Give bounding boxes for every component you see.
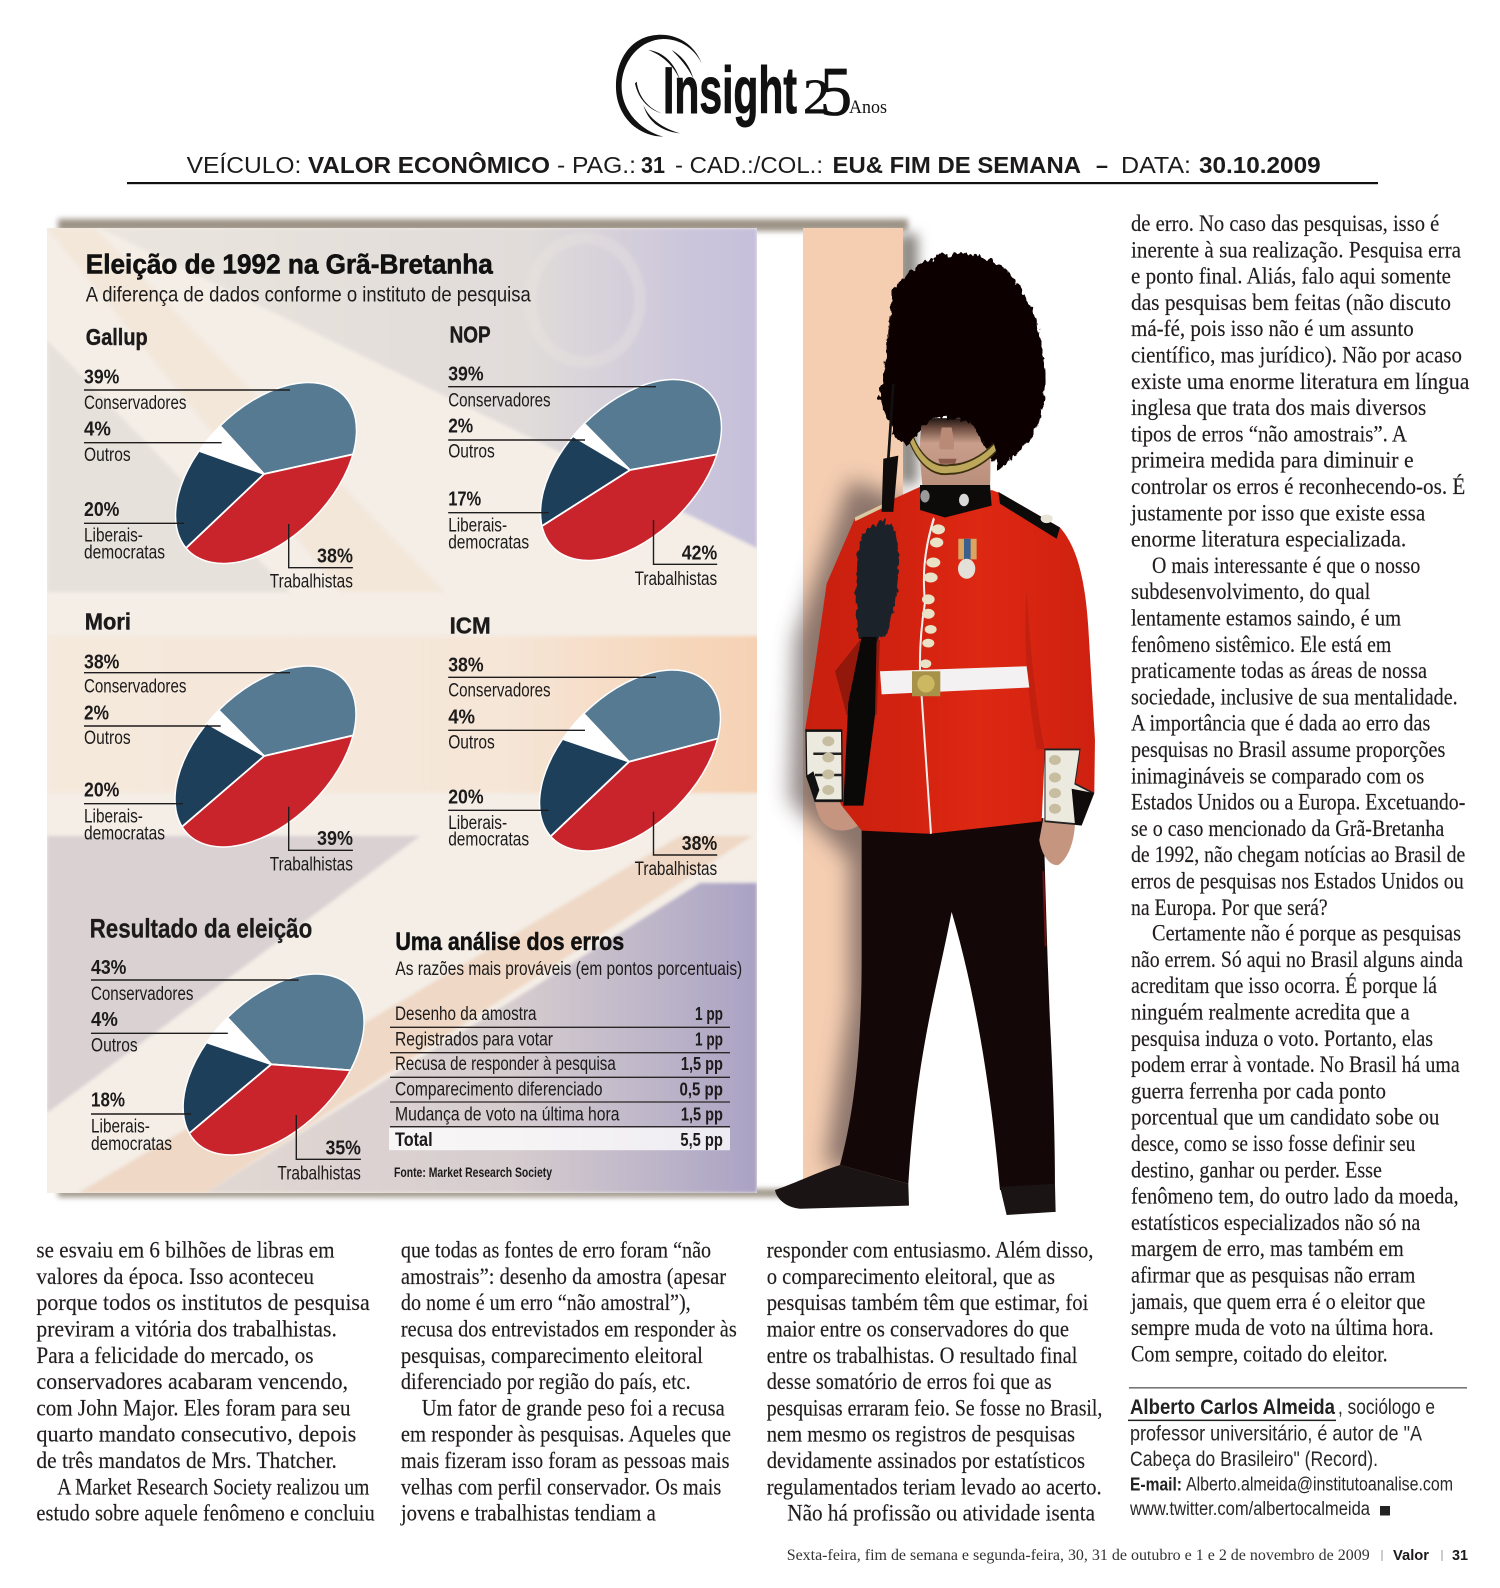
article text: right column: controlar os erros é reconhecendo-os. É xyxy=(1131,474,1465,499)
article text: right column: destino, ganhar ou perder. Esse xyxy=(1131,1157,1382,1182)
article text: column 2: mais fizeram isso foram as pessoas mais xyxy=(401,1448,730,1473)
logo wordmark: Insight xyxy=(663,53,797,127)
header: publication details: - PAG.: xyxy=(557,152,636,178)
article text: column 2: recusa dos entrevistados em responder às xyxy=(401,1316,737,1342)
pie chart: Gallup: 4% xyxy=(84,419,111,441)
pie chart: NOP: democratas xyxy=(448,532,529,553)
left cuff xyxy=(806,731,842,801)
article text: column 3: pesquisas também têm que estimar, foi xyxy=(767,1290,1088,1315)
table: Uma análise dos erros: Comparecimento diferenciado xyxy=(395,1080,602,1101)
pie chart: Gallup: Conservadores xyxy=(84,393,186,414)
panel shadow xyxy=(58,219,918,1197)
article text: right column: fenômeno sistêmico. Ele está em xyxy=(1131,632,1391,657)
epaulette xyxy=(998,492,1060,539)
author note: Alberto.almeida@institutoanalise.com xyxy=(1186,1475,1453,1496)
pie chart: Gallup xyxy=(84,328,358,588)
left boot xyxy=(775,1165,909,1209)
article text: column 2: pesquisas, comparecimento eleitoral xyxy=(401,1343,703,1368)
article text: right column: pesquisa induza o voto. Portanto, elas xyxy=(1131,1026,1433,1051)
page footer: Valor xyxy=(1393,1548,1429,1564)
article text: right column: na Europa. Por que será? xyxy=(1131,895,1328,920)
article text: right column: sociedade, inclusive de sua mentalidade. xyxy=(1131,684,1458,709)
collar xyxy=(920,485,992,518)
guard cast shadow xyxy=(790,480,910,1175)
header: publication details: VEÍCULO: xyxy=(187,152,301,178)
panel: Union Jack background xyxy=(47,228,803,1193)
article text: right column: Certamente não é porque as pesquisas xyxy=(1152,921,1461,946)
pie chart: ICM xyxy=(448,617,722,875)
hands xyxy=(815,802,860,830)
pie chart: Gallup: 38% xyxy=(317,545,353,567)
bearskin hat xyxy=(878,254,1045,471)
pie chart: ICM: ICM xyxy=(450,612,491,638)
table: Uma análise dos erros: Registrados para votar xyxy=(395,1029,554,1050)
article text: right column: porcentual que um candidato sobe ou xyxy=(1131,1105,1440,1130)
article text: right column: podem errar à vontade. No Brasil há uma xyxy=(1131,1052,1460,1077)
article text: column 1: previram a vitória dos trabalhistas. xyxy=(36,1316,337,1342)
article text: column 3: devidamente assinados por estatísticos xyxy=(767,1448,1085,1473)
pie chart: NOP: Outros xyxy=(448,442,495,463)
logo number 25 xyxy=(803,54,852,131)
table: Uma análise dos erros: Total xyxy=(395,1130,433,1151)
pie chart: ICM: 20% xyxy=(448,786,484,808)
right boot xyxy=(1000,1184,1056,1215)
pie chart: Resultado da eleição: democratas xyxy=(91,1134,172,1155)
article text: column 3: desse somatório de erros foi que as xyxy=(767,1369,1052,1394)
article text: right column: subdesenvolvimento, do qual xyxy=(1131,579,1370,604)
trousers xyxy=(840,818,1055,1190)
article text: column 3: entre os trabalhistas. O resultado final xyxy=(767,1343,1077,1368)
pie chart: Resultado da eleição xyxy=(91,918,365,1180)
pie chart: Resultado da eleição: Liberais- xyxy=(91,1116,150,1137)
logo Anos: Anos xyxy=(849,97,887,118)
pie chart: Gallup: Outros xyxy=(84,445,131,466)
table: Uma análise dos erros: Mudança de voto na última hora xyxy=(395,1105,620,1126)
pie chart: Mori: democratas xyxy=(84,823,165,844)
pie chart: Mori xyxy=(84,612,357,870)
article text: column 1: A Market Research Society realizou um xyxy=(57,1474,369,1499)
article text: column 3: nem mesmo os registros de pesquisas xyxy=(767,1422,1075,1447)
pie chart: Resultado da eleição: 43% xyxy=(91,957,127,979)
table: Uma análise dos erros: Uma análise dos erros xyxy=(395,928,624,956)
pie chart: NOP: NOP xyxy=(450,321,491,347)
pie chart: Gallup: Gallup xyxy=(86,324,148,350)
article text: right column: de erro. No caso das pesquisas, isso é xyxy=(1131,211,1439,236)
article text: column 3: maior entre os conservadores do que xyxy=(767,1316,1069,1342)
pie chart: Resultado da eleição: 35% xyxy=(326,1137,361,1159)
pie chart: NOP: Conservadores xyxy=(448,390,551,412)
article text: column 1: porque todos os institutos de pesquisa xyxy=(36,1290,370,1315)
header: publication details: 30.10.2009 xyxy=(1199,152,1321,178)
article text: right column: das pesquisas bem feitas (não discuto xyxy=(1131,290,1451,315)
article text: right column: O mais interessante é que o nosso xyxy=(1152,553,1420,578)
article text: column 1: Para a felicidade do mercado, os xyxy=(36,1343,314,1368)
article text: right column: ninguém realmente acredita que a xyxy=(1131,1000,1410,1024)
pie chart: ICM: Liberais- xyxy=(448,813,507,834)
pie chart: Gallup: democratas xyxy=(84,542,165,563)
article text: right column xyxy=(1130,211,1469,1366)
article text: right column: enorme literatura especializada. xyxy=(1131,527,1406,552)
author note: E-mail: xyxy=(1130,1474,1182,1495)
pie xyxy=(174,665,357,848)
pie chart: NOP: 39% xyxy=(448,364,484,386)
header: publication details: – xyxy=(1096,152,1108,178)
article text: column 3: o comparecimento eleitoral, que as xyxy=(767,1264,1055,1289)
article text: column 2: em responder às pesquisas. Aqueles que xyxy=(401,1422,731,1447)
table: Uma análise dos erros: 1 pp xyxy=(695,1029,723,1049)
tunic placket xyxy=(920,518,934,834)
page footer: 31 xyxy=(1452,1548,1468,1564)
article text: right column: acreditam que isso ocorra. É porque lá xyxy=(1131,973,1437,998)
gold chin strap xyxy=(912,440,995,470)
pie chart: ICM: Outros xyxy=(448,732,495,753)
author note xyxy=(1128,1387,1467,1520)
white belt xyxy=(880,666,1029,694)
author note: Alberto Carlos Almeida xyxy=(1130,1395,1336,1419)
header: publication details: VALOR ECONÔMICO xyxy=(308,151,550,178)
pie chart: Resultado da eleição: 4% xyxy=(91,1009,118,1031)
pie xyxy=(182,973,365,1156)
table: Uma análise dos erros: 5,5 pp xyxy=(680,1130,723,1150)
article text: column 2: que todas as fontes de erro foram “não xyxy=(401,1238,711,1263)
article text: column 1: conservadores acabaram vencendo, xyxy=(36,1369,348,1394)
illustration: royal guard soldier xyxy=(775,254,1095,1215)
article text: column 1: quarto mandato consecutivo, depois xyxy=(36,1422,356,1447)
article text: column 2: velhas com perfil conservador. Os mais xyxy=(401,1474,721,1499)
article text: column 3: Não há profissão ou atividade isenta xyxy=(787,1501,1095,1526)
table: Uma análise dos erros xyxy=(389,928,742,1151)
article text: right column: Com sempre, coitado do eleitor. xyxy=(1131,1341,1388,1366)
vertical peach band xyxy=(803,228,903,1193)
pie chart: Mori: Mori xyxy=(85,608,131,634)
article text: column 1: valores da época. Isso aconteceu xyxy=(36,1264,314,1289)
article text: column 2: do nome é um erro “não amostral”), xyxy=(401,1290,691,1315)
article text: right column: A importância que é dada ao erro das xyxy=(1131,711,1430,736)
pie chart: Mori: 20% xyxy=(84,780,120,802)
pie chart: Resultado da eleição: 18% xyxy=(91,1090,125,1112)
author note: www.twitter.com/albertocalmeida xyxy=(1129,1499,1370,1520)
author note: professor universitário, é autor de "A xyxy=(1130,1423,1422,1446)
pie chart: NOP: 17% xyxy=(448,489,481,511)
pie chart: ICM: Conservadores xyxy=(448,681,551,702)
logo number 25: 5 xyxy=(820,54,852,131)
pie chart: ICM: 38% xyxy=(448,655,484,677)
pie chart: Resultado da eleição: Outros xyxy=(91,1036,138,1057)
article text: column 2: amostrais”: desenho da amostra (apesar xyxy=(401,1264,726,1289)
pie chart: ICM: 38% xyxy=(682,833,717,855)
right cuff xyxy=(1045,749,1093,824)
neck and face xyxy=(919,418,991,496)
header: publication details: - CAD.:/COL.: xyxy=(675,152,823,178)
pie chart: Gallup: Liberais- xyxy=(84,526,143,547)
article text: right column: desce, como se isso fosse definir seu xyxy=(1131,1131,1416,1156)
pie chart: NOP: 42% xyxy=(682,542,717,564)
pie chart: Mori: 2% xyxy=(84,702,109,724)
graphic title: Eleição de 1992 na Grã-Bretanha xyxy=(86,248,493,279)
article text: column 3: pesquisas erraram feio. Se fosse no Brasil, xyxy=(767,1395,1102,1420)
article text: right column: tipos de erros “não amostrais”. A xyxy=(1131,421,1407,446)
article text: right column: sempre muda de voto na última hora. xyxy=(1131,1315,1434,1340)
rifle plume xyxy=(856,522,899,640)
source note: Fonte: Market Research Society xyxy=(394,1165,552,1180)
article text: right column: e ponto final. Aliás, falo aqui somente xyxy=(1131,264,1451,289)
article text: column 3: responder com entusiasmo. Além disso, xyxy=(767,1238,1093,1263)
article text: column 2: jovens e trabalhistas tendiam a xyxy=(400,1501,656,1526)
article text: right column: científico, mas jurídico). Não por acaso xyxy=(1131,342,1462,368)
article text: right column: pesquisas no Brasil assume proporções xyxy=(1131,737,1445,762)
logo number 25: 2 xyxy=(803,68,830,124)
pie chart: ICM: 4% xyxy=(448,706,475,728)
table: Uma análise dos erros: 1,5 pp xyxy=(681,1105,723,1125)
article text: right column: inglesa que trata dos mais diversos xyxy=(1131,395,1426,420)
graphic subtitle: A diferença de dados conforme o instituto de pesquisa xyxy=(86,283,531,307)
article text: right column: inerente à sua realização. Pesquisa erra xyxy=(1131,237,1461,262)
article text: column 1: com John Major. Eles foram para seu xyxy=(36,1395,351,1420)
table: Uma análise dos erros: 1,5 pp xyxy=(681,1054,723,1074)
header: publication details: 31 xyxy=(641,152,665,178)
pie chart: Gallup: Trabalhistas xyxy=(270,572,353,593)
pie chart: ICM: Trabalhistas xyxy=(635,859,717,880)
article text: right column: jamais, que quem erra é o eleitor que xyxy=(1130,1289,1425,1314)
pie chart: Mori: Outros xyxy=(84,728,131,749)
page footer: Sexta-feira, fim de semana e segunda-feira, 30, 31 de outubro e 1 e 2 de novembro de 2009 xyxy=(787,1547,1370,1564)
article text: right column: existe uma enorme literatura em língua xyxy=(1131,369,1469,394)
article text: column 2: Um fator de grande peso foi a recusa xyxy=(422,1395,725,1420)
pie xyxy=(540,378,722,562)
pie chart: NOP xyxy=(448,326,722,585)
pie chart: Mori: Trabalhistas xyxy=(270,855,353,876)
table: Uma análise dos erros: Desenho da amostra xyxy=(395,1004,537,1025)
pie xyxy=(538,669,722,852)
pie chart: Gallup: 39% xyxy=(84,366,120,388)
article text: right column: se o caso mencionado da Grã-Bretanha xyxy=(1131,816,1444,841)
header: publication details xyxy=(187,151,1321,178)
pie chart: NOP: Trabalhistas xyxy=(635,569,717,590)
table: Uma análise dos erros: As razões mais prováveis (em pontos porcentuais) xyxy=(395,958,742,980)
pie chart: Resultado da eleição: Conservadores xyxy=(91,984,193,1005)
table: Uma análise dos erros: 1 pp xyxy=(695,1004,723,1024)
red tunic xyxy=(805,487,1095,834)
header: publication details: EU& FIM DE SEMANA xyxy=(832,152,1081,178)
article text: column 3: regulamentados teriam levado ao acerto. xyxy=(767,1474,1102,1499)
article text: column 1: estudo sobre aquele fenômeno e concluiu xyxy=(36,1501,375,1526)
article text: right column: praticamente todas as áreas de nossa xyxy=(1131,658,1427,683)
pie chart: Mori: Liberais- xyxy=(84,807,143,828)
medal xyxy=(958,539,977,559)
logo: Insight 25 Anos xyxy=(616,35,887,137)
article text: right column: fenômeno tem, do outro lado da moeda, xyxy=(1131,1184,1459,1209)
article text: column 3 xyxy=(767,1238,1102,1526)
article text: column 2: diferenciado por região do país, etc. xyxy=(401,1369,691,1394)
author note: , sociólogo e xyxy=(1338,1396,1435,1419)
article text: right column: primeira medida para diminuir e xyxy=(1131,448,1414,473)
article text: right column: lentamente estamos saindo, é um xyxy=(1131,606,1401,630)
table: Uma análise dos erros: Recusa de responder à pesquisa xyxy=(395,1054,616,1075)
article text: column 1: se esvaiu em 6 bilhões de libras em xyxy=(36,1238,335,1263)
article text: column 1: de três mandatos de Mrs. Thatcher. xyxy=(36,1448,337,1473)
author note: Cabeça do Brasileiro" (Record). xyxy=(1130,1448,1378,1471)
article text: column 1 xyxy=(36,1238,375,1526)
logo swoosh xyxy=(616,35,702,137)
article text: right column: justamente por isso que existe essa xyxy=(1130,500,1425,525)
article text: right column: estatísticos especializados não só na xyxy=(1131,1210,1420,1235)
article text: right column: inimagináveis se comparado com os xyxy=(1131,763,1424,788)
pie chart: Mori: 39% xyxy=(317,828,353,850)
pie chart: Gallup: 20% xyxy=(84,499,120,521)
tunic buttons xyxy=(920,524,945,668)
pie xyxy=(174,382,358,564)
pie chart: Mori: 38% xyxy=(84,651,120,673)
rifle xyxy=(843,637,877,806)
article text: column 2 xyxy=(400,1238,737,1526)
pie chart: NOP: Liberais- xyxy=(448,516,507,537)
article text: right column: afirmar que as pesquisas não erram xyxy=(1131,1262,1415,1288)
pie chart: ICM: democratas xyxy=(448,830,529,851)
pie chart: Mori: Conservadores xyxy=(84,676,186,697)
pie chart: Resultado da eleição: Resultado da eleição xyxy=(90,914,312,944)
table: Uma análise dos erros: 0,5 pp xyxy=(680,1080,723,1100)
article text: right column: guerra ferrenha por cada ponto xyxy=(1131,1078,1386,1103)
pie chart: NOP: 2% xyxy=(448,416,473,438)
header: publication details: DATA: xyxy=(1121,152,1191,178)
article text: right column: margem de erro, mas também em xyxy=(1131,1236,1404,1261)
article text: right column: má-fé, pois isso não é um assunto xyxy=(1131,316,1414,341)
pie chart: Resultado da eleição: Trabalhistas xyxy=(277,1163,361,1184)
